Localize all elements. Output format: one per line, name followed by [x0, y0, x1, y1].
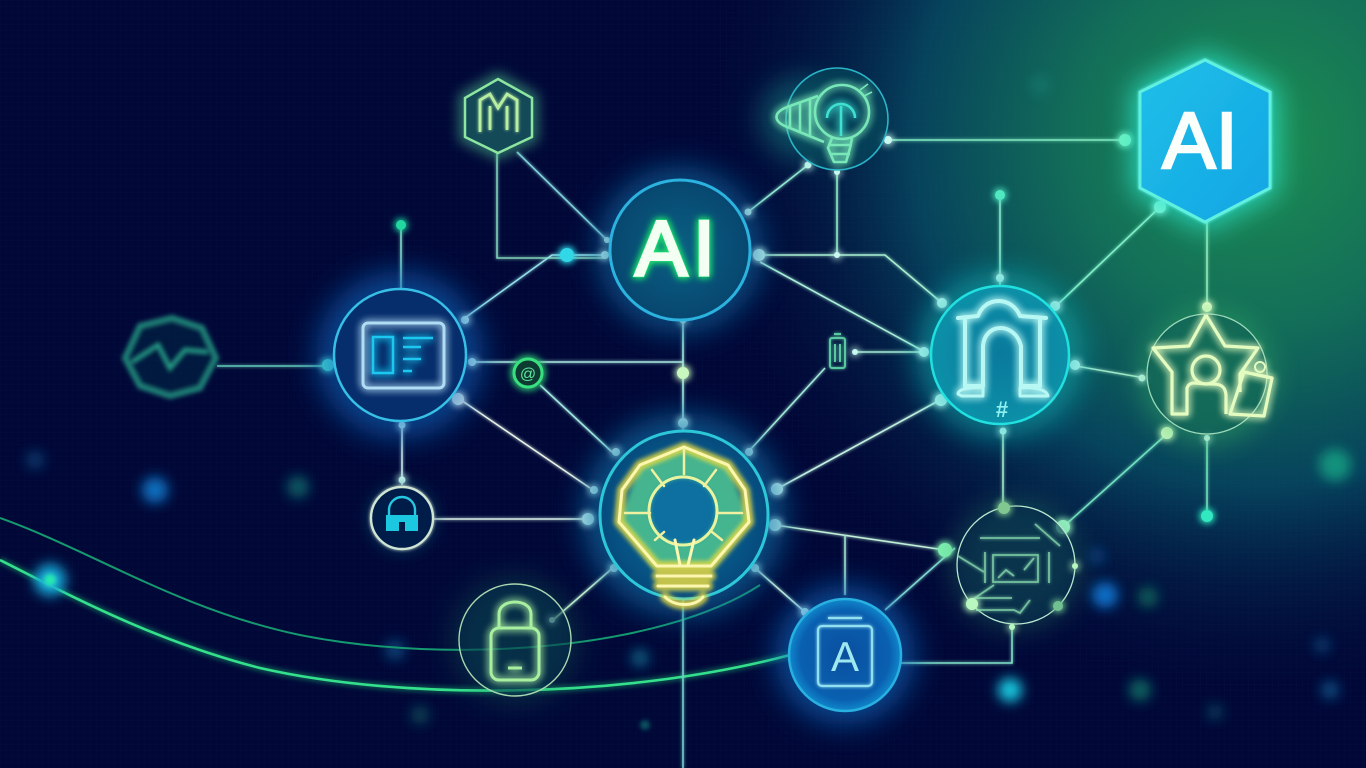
node: A circle	[775, 585, 915, 725]
connector lines	[217, 140, 1207, 768]
connector nodes	[322, 134, 1213, 623]
node: doc circle	[316, 271, 484, 439]
node: small @ icon	[514, 359, 542, 387]
node: AI hexagon: AI	[1162, 96, 1238, 185]
node: arch circle: #	[996, 397, 1008, 422]
node: chart circle	[952, 501, 1080, 630]
node: lock circle	[366, 482, 438, 554]
node: AI circle	[596, 166, 764, 334]
node: large bulb	[582, 413, 786, 617]
node: A circle: A	[831, 633, 859, 680]
node: AI hexagon	[1140, 60, 1270, 222]
hexagon icon far left	[125, 318, 216, 396]
node: AI circle: AI	[635, 204, 721, 292]
node: padlock circle	[453, 578, 577, 702]
flowing green curves	[0, 518, 790, 691]
node: arch circle	[916, 271, 1084, 439]
node: small @ icon: @	[520, 366, 536, 383]
node: lightbulb top circle	[760, 68, 888, 170]
hexagon icon top left	[465, 79, 532, 153]
node: AI circle: AI	[635, 204, 721, 292]
node: battery small icon	[830, 334, 845, 368]
node: star circle	[1141, 312, 1273, 444]
